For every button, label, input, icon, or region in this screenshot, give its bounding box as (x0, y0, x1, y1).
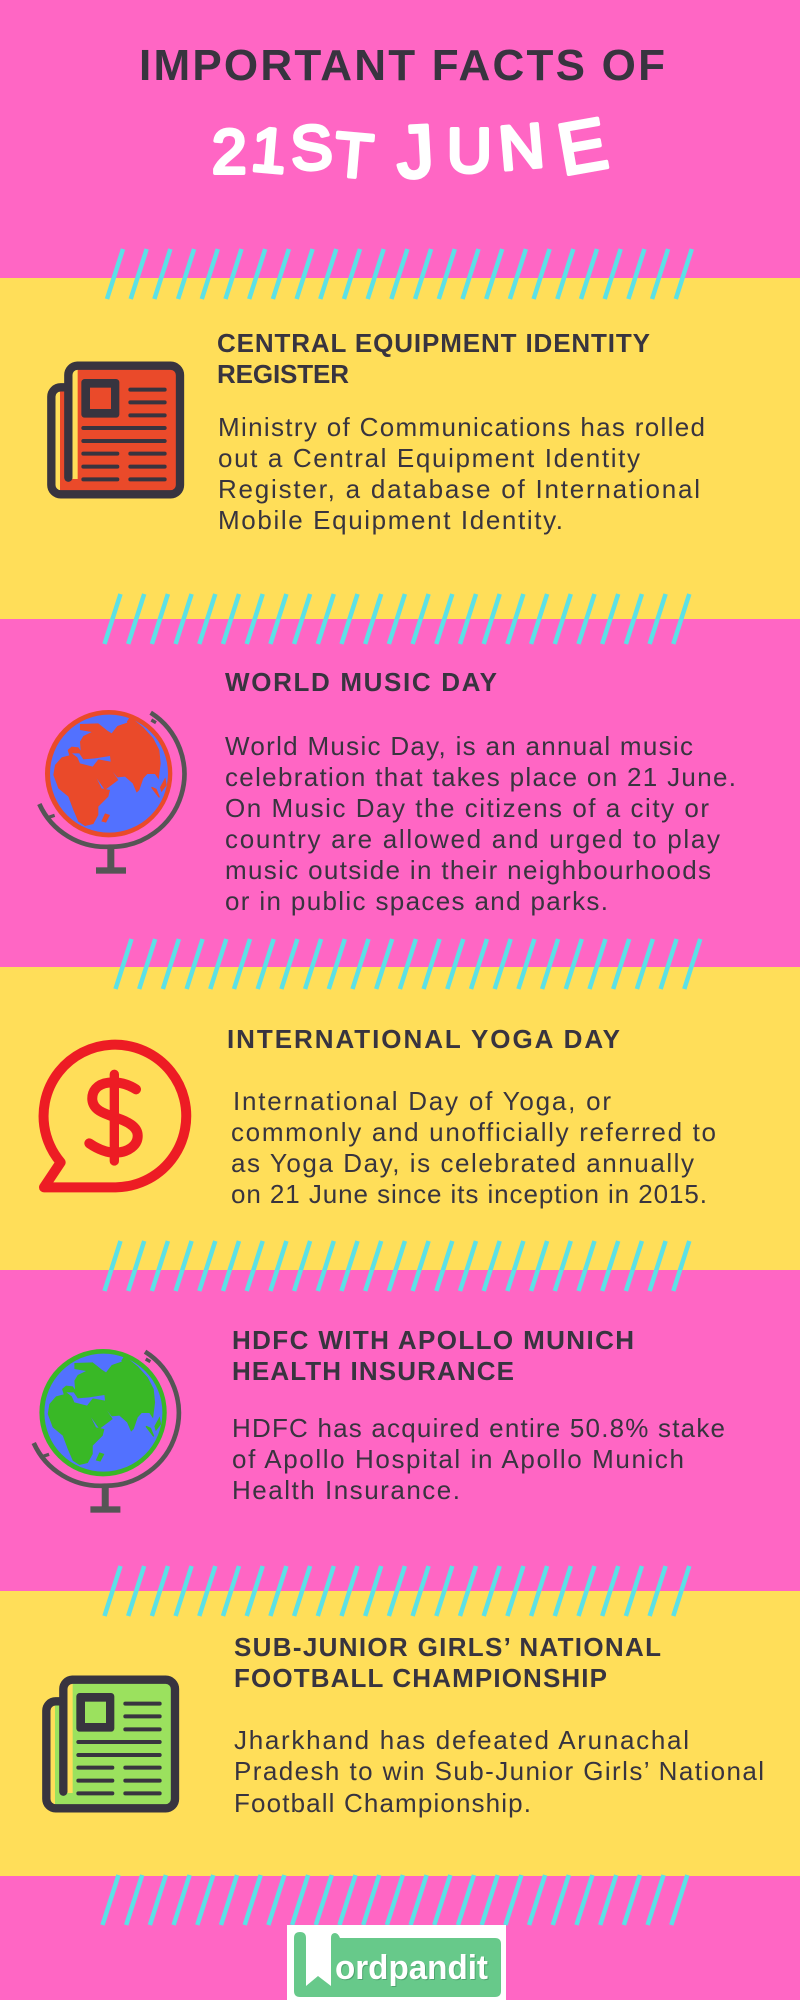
body text: or in public spaces and parks. (225, 886, 608, 916)
body text: Football Championship. (234, 1788, 531, 1818)
title: 21st june: UN (447, 111, 547, 186)
heading: HEALTH INSURANCE (232, 1356, 514, 1386)
panel: sub-junior girls national football championship (0, 1591, 800, 1876)
title: 21st june: E (552, 104, 613, 191)
divider stripes (102, 249, 700, 1925)
body text: on 21 June since its inception in 2015. (231, 1179, 707, 1209)
body text: country are allowed and urged to play (225, 824, 720, 854)
heading: REGISTER (217, 359, 349, 389)
icon: green newspaper (46, 1680, 175, 1808)
panel: international yoga day (0, 967, 800, 1271)
logo: wordpandit: ordpandit (335, 1949, 488, 1987)
logo: wordpandit (287, 1925, 506, 2000)
body text (218, 412, 705, 535)
heading: CENTRAL EQUIPMENT IDENTITY (217, 328, 650, 358)
body text: commonly and unofficially referred to (231, 1117, 716, 1147)
heading (232, 1325, 634, 1386)
panel: hdfc with apollo munich (0, 1270, 800, 1591)
heading: INTERNATIONAL YOGA DAY (227, 1024, 620, 1054)
title: 21st june: J (394, 109, 436, 194)
header panel (0, 0, 800, 278)
body text: of Apollo Hospital in Apollo Munich (232, 1444, 684, 1474)
body text: as Yoga Day, is celebrated annually (231, 1148, 694, 1178)
body text (232, 1413, 725, 1505)
body text: music outside in their neighbourhoods (225, 855, 711, 885)
body text: Health Insurance. (232, 1475, 460, 1505)
body text: HDFC has acquired entire 50.8% stake (232, 1413, 725, 1443)
body text: out a Central Equipment Identity (218, 443, 640, 473)
body text: Jharkhand has defeated Arunachal (234, 1725, 689, 1755)
heading: SUB-JUNIOR GIRLS’ NATIONAL (234, 1632, 661, 1662)
body text (234, 1725, 764, 1818)
body text: celebration that takes place on 21 June. (225, 762, 736, 792)
body text: Register, a database of International (218, 474, 700, 504)
body text: Pradesh to win Sub-Junior Girls’ National (234, 1756, 764, 1786)
body text: Mobile Equipment Identity. (218, 505, 563, 535)
body text: World Music Day, is an annual music (225, 731, 693, 761)
body text: International Day of Yoga, or (233, 1086, 611, 1116)
heading: FOOTBALL CHAMPIONSHIP (234, 1663, 607, 1693)
icon: globe with red land (39, 710, 184, 874)
heading: WORLD MUSIC DAY (225, 667, 497, 697)
title: important facts of: IMPORTANT FACTS OF (139, 41, 665, 90)
body text (231, 1086, 716, 1209)
panel: world music day (0, 619, 800, 967)
heading: HDFC WITH APOLLO MUNICH (232, 1325, 634, 1355)
body text: Ministry of Communications has rolled (218, 412, 705, 442)
icon: red newspaper (51, 366, 180, 494)
body text (225, 731, 736, 916)
footer band (0, 1876, 800, 2000)
title: 21st june: 21ST (212, 113, 375, 192)
heading (217, 328, 650, 389)
panel: central equipment identity register (0, 278, 800, 619)
icon: dollar speech bubble (44, 1045, 186, 1187)
icon: globe with green land (34, 1349, 179, 1513)
body text: On Music Day the citizens of a city or (225, 793, 709, 823)
heading (234, 1632, 661, 1693)
